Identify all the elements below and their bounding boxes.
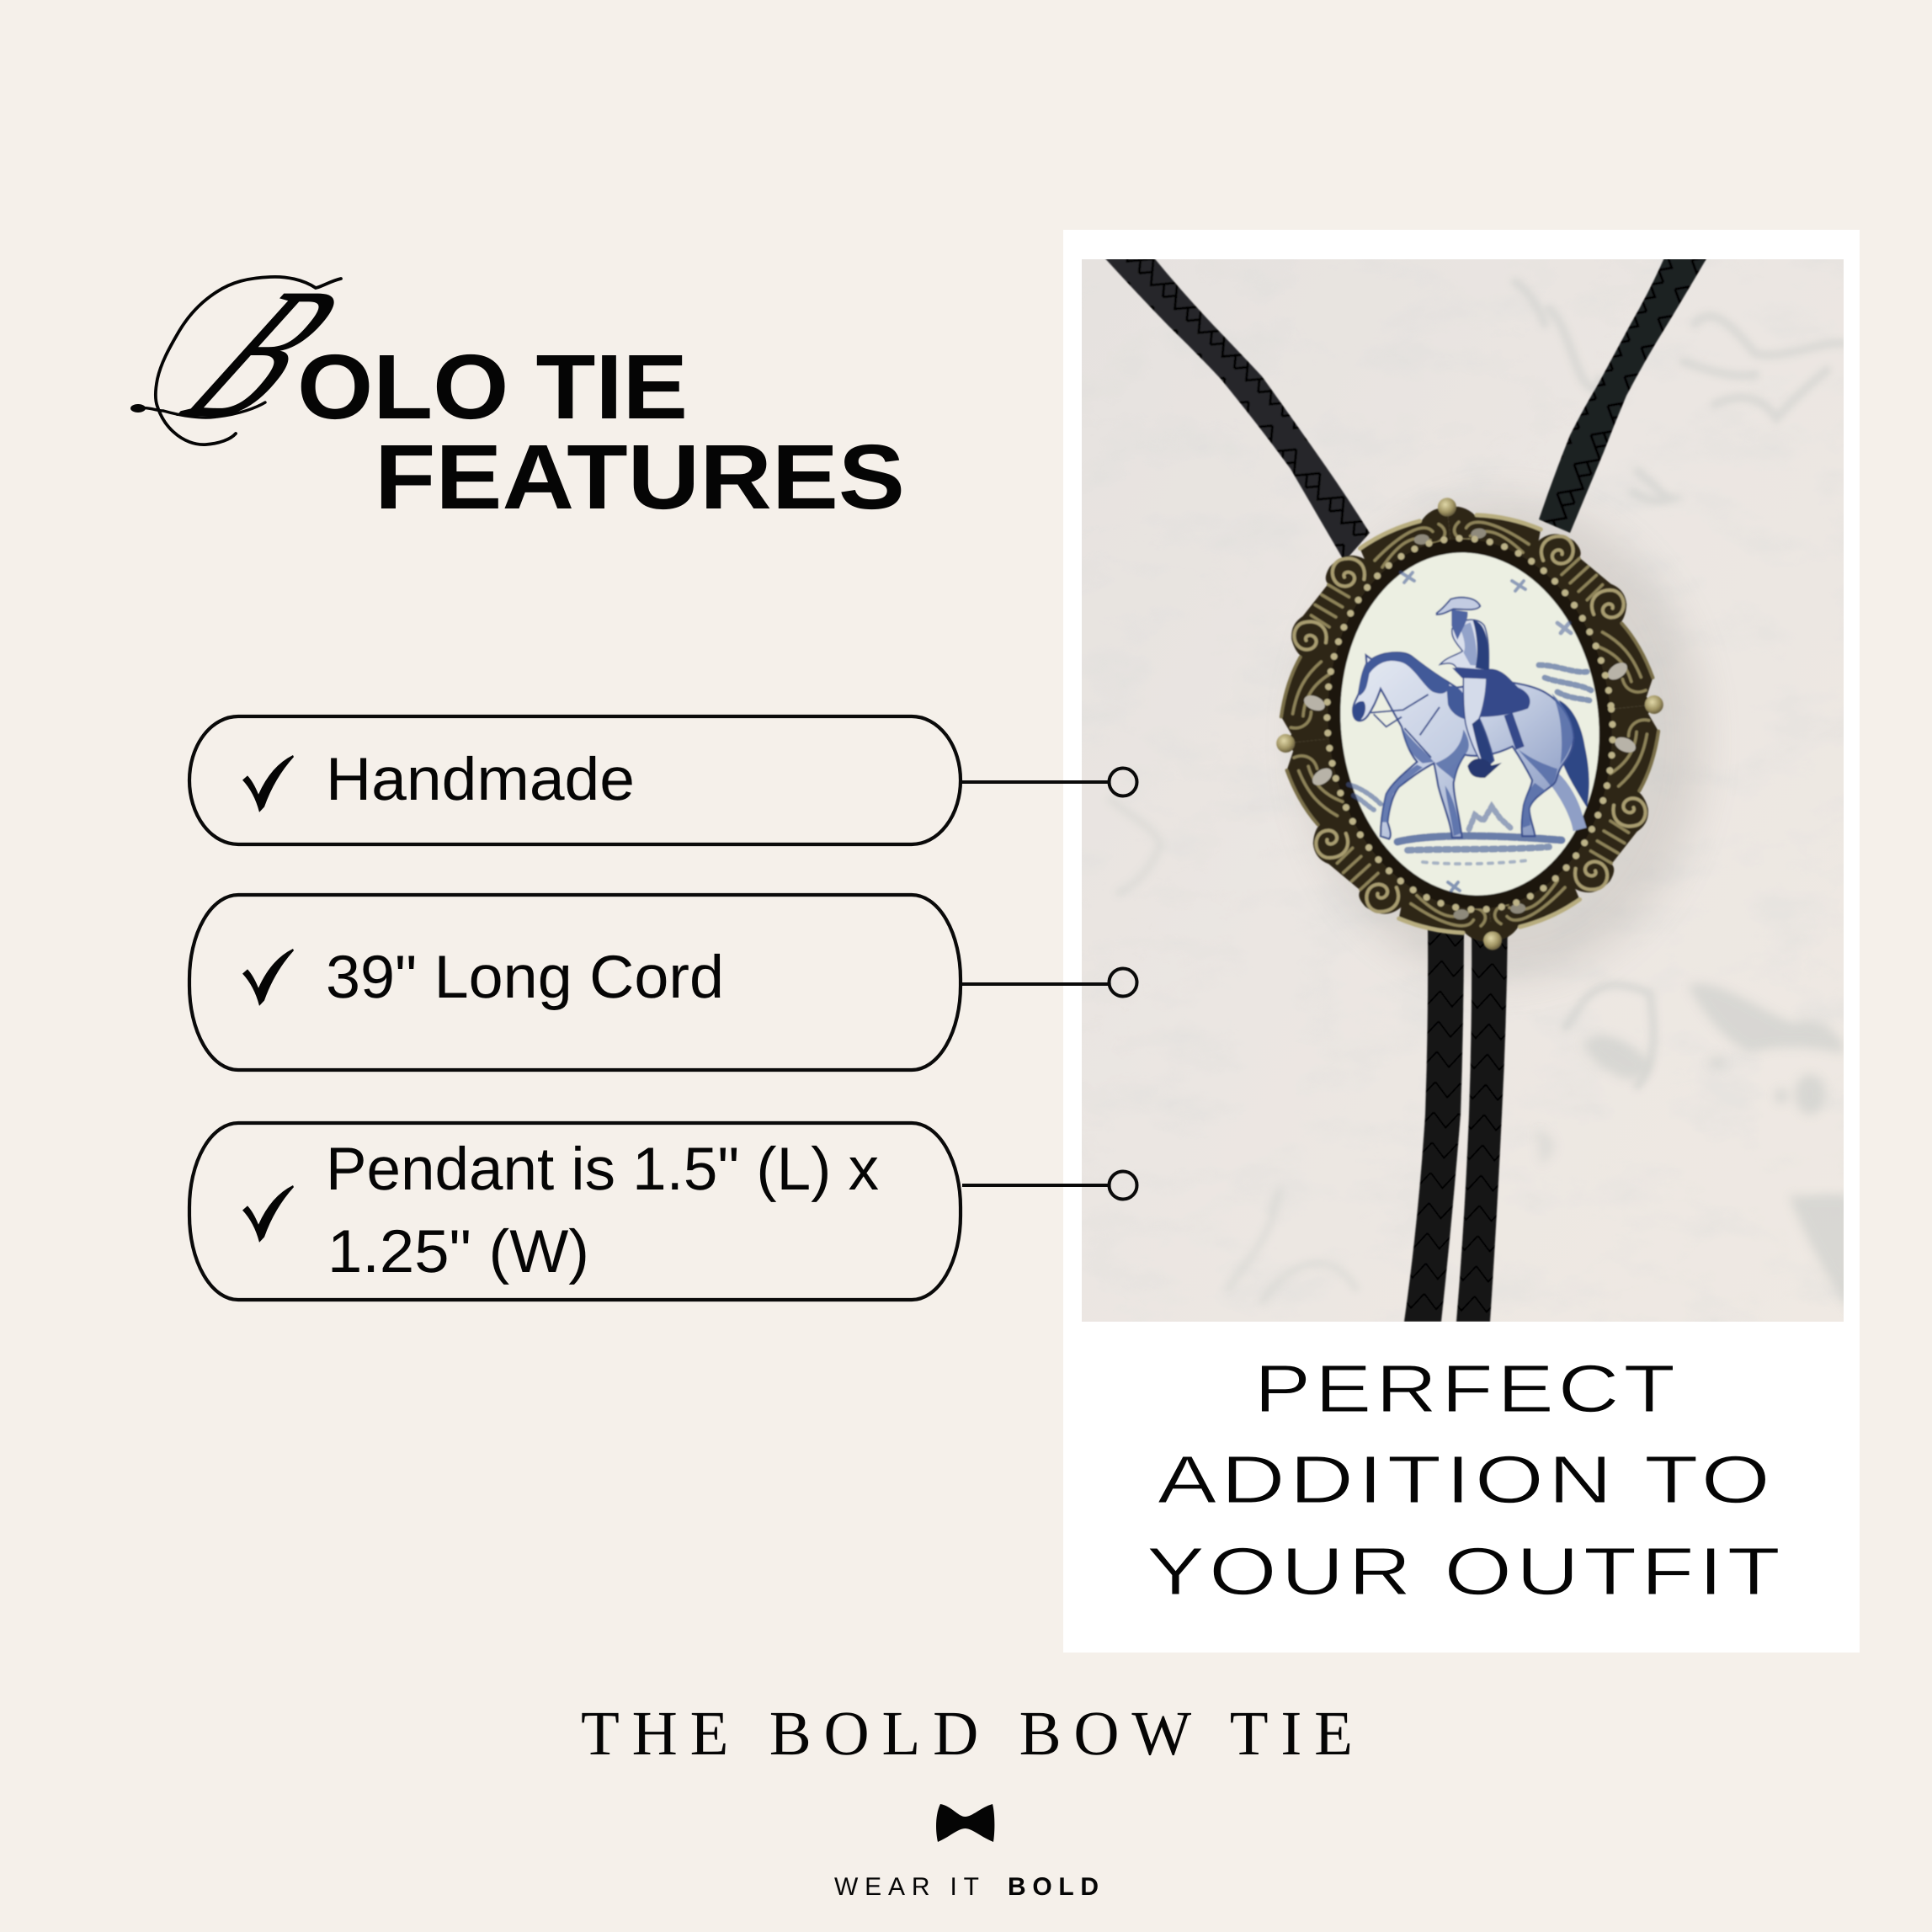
muscle shading: [1382, 693, 1573, 836]
hat: [1437, 598, 1480, 615]
brand name: THE BOLD BOW TIE: [581, 1699, 1353, 1769]
panel: white product card: [1063, 230, 1860, 1653]
saddle: [1480, 669, 1530, 717]
label: pendant size: 1.25" (W): [327, 1218, 589, 1285]
horse body: [1353, 652, 1573, 839]
bead ring: [1328, 539, 1611, 909]
horse and rider: [1353, 598, 1589, 839]
icon: bow tie logo: [936, 1804, 994, 1842]
mane: [1360, 652, 1450, 696]
torso shading: [1459, 622, 1477, 666]
muzzle shade: [1353, 701, 1365, 721]
tagline: BOLD: [1008, 1873, 1099, 1901]
corner knobs: [1275, 497, 1664, 951]
toile scenery: [1349, 572, 1591, 891]
pendant: [1275, 497, 1664, 951]
connector: pendant size: [962, 1172, 1136, 1199]
belt: [1452, 668, 1489, 679]
caption line 3: YOUR OUTFIT: [1147, 1534, 1785, 1609]
product photo: [1082, 256, 1852, 1322]
title line 2: FEATURES: [375, 426, 905, 529]
icon: check mark: [242, 949, 294, 1006]
cord: lower left: [1404, 922, 1464, 1322]
tagline: [834, 1873, 1099, 1901]
feature pill: pendant size: [189, 1123, 961, 1300]
label: pendant size: [326, 1136, 879, 1285]
caption: [1147, 1351, 1785, 1609]
icon: check mark: [242, 1185, 294, 1243]
script initial B: B: [143, 250, 382, 457]
cord: upper right: [1539, 256, 1708, 533]
feature pill: 39 inch long cord: [189, 895, 961, 1070]
caption line 2: ADDITION TO: [1158, 1442, 1775, 1517]
rider leg: [1463, 676, 1494, 769]
cord: lower right: [1456, 922, 1508, 1322]
metal frame: [1275, 497, 1664, 951]
feature pill: Handmade: [189, 716, 961, 844]
tagline: WEAR IT: [834, 1873, 979, 1901]
caption line 1: PERFECT: [1254, 1351, 1679, 1426]
rider torso: [1440, 620, 1489, 671]
connector: long cord: [961, 968, 1136, 997]
marble veins: [1111, 282, 1844, 1301]
vest: [1472, 620, 1489, 671]
tail: [1559, 700, 1589, 807]
horse far hind leg: [1551, 774, 1588, 832]
cord: upper left: [1103, 256, 1370, 562]
harness straps: [1370, 695, 1440, 758]
label: 39 inch long cord: 39" Long Cord: [326, 944, 724, 1011]
title line 1: OLO TIE: [297, 336, 688, 439]
connector: Handmade: [961, 768, 1136, 796]
face and beard: [1451, 609, 1467, 640]
label: Handmade: Handmade: [326, 746, 635, 813]
soft shadow of pendant and cords: [1301, 501, 1705, 981]
stirrup and boot: [1467, 758, 1502, 778]
shoulder front of saddle: [1446, 686, 1467, 720]
icon: check mark: [242, 755, 294, 812]
title: Bolo Tie Features: [130, 250, 905, 529]
porcelain oval: [1339, 551, 1601, 897]
label: pendant size: Pendant is 1.5" (L) x: [326, 1136, 879, 1203]
